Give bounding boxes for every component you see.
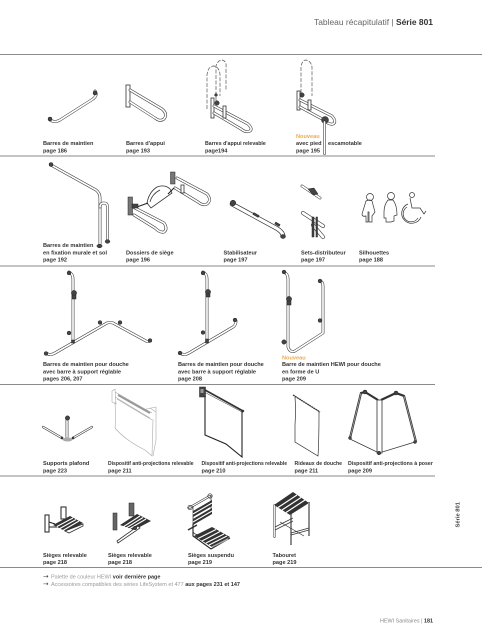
icon: stabiliser xyxy=(230,200,286,238)
icon: folding seat with leg xyxy=(113,503,151,543)
label: Barres de maintien en fixation murale et sol: page 192 xyxy=(43,258,67,264)
note: compatible accessories: → xyxy=(43,580,49,588)
icon: silhouettes woman, man, wheelchair xyxy=(362,192,426,223)
icon: folding splash guard, light xyxy=(112,389,156,456)
icon: folding seat 1 xyxy=(45,507,83,533)
label: first folding splash guard caption: Dispositif anti-projections relevable xyxy=(108,461,194,467)
label: avec pied escamotable: escamotable xyxy=(328,141,362,147)
icon: shower bar with adjustable support 1 xyxy=(44,271,152,355)
label: shower bar 1: pages 206, 207 xyxy=(43,377,82,383)
label: shower bar 2: Barres de maintien pour douche xyxy=(178,362,264,368)
label: Silhouettes: page 188 xyxy=(359,258,383,264)
label: free-standing guard caption: page 209 xyxy=(348,468,372,474)
icon: suspended seat xyxy=(188,494,230,549)
label: first folding splash guard caption: page 211 xyxy=(108,468,132,474)
label: Sièges relevable: page 218 xyxy=(43,560,67,566)
label: shower bar 2: page 208 xyxy=(178,377,202,383)
label: Barres de maintien en fixation murale et sol: en fixation murale et sol xyxy=(43,250,107,256)
icon: grab bar xyxy=(48,91,97,122)
icon: folding splash guard, dark xyxy=(200,387,244,457)
label: Barres d'appui: page 193 xyxy=(126,148,150,154)
label: Silhouettes: Silhouettes xyxy=(359,250,389,256)
label: Sets-distributeur: page 197 xyxy=(301,258,325,264)
icon: support bar with retractable foot xyxy=(297,60,335,154)
icon: U-shaped shower bar xyxy=(282,270,323,352)
label: Stabilisateur: Stabilisateur xyxy=(224,250,257,256)
label: Dossiers de siège: Dossiers de siège xyxy=(126,250,174,256)
icon: ceiling supports xyxy=(43,416,92,442)
label: Supports plafond: page 223 xyxy=(43,468,67,474)
note: colour palette: Palette de couleur HEWI xyxy=(51,574,113,580)
label: shower bar 1: Barres de maintien pour douche xyxy=(43,362,129,368)
label: Barres d'appui: Barres d'appui xyxy=(126,141,165,147)
note: colour palette: voir dernière page xyxy=(113,574,160,580)
label: Barres de maintien: Barres de maintien xyxy=(43,141,93,147)
page header title: Tableau récapitulatif | Série 801 xyxy=(314,17,433,27)
note: compatible accessories: aux pages 231 et 147 xyxy=(185,582,240,588)
icon: stool xyxy=(274,492,309,544)
footer page number: HEWI Sanitaires | 181 xyxy=(380,618,433,624)
label: second folding splash guard caption: page 210 xyxy=(202,468,225,474)
label: U-shaped bar caption: en forme de U xyxy=(282,369,319,375)
label: Barres d'appui relevable: Barres d'appui relevable xyxy=(205,141,266,147)
icon: seat backrest xyxy=(128,172,210,232)
label: Sièges relevable 2: Sièges relevable xyxy=(108,553,152,559)
label: Barres de maintien en fixation murale et sol: Barres de maintien xyxy=(43,243,93,249)
label: Nouveau: Nouveau xyxy=(282,356,306,362)
label: avec pied escamotable: page 195 xyxy=(296,148,320,154)
icon: folding support bar xyxy=(207,60,251,132)
label: Supports plafond: Supports plafond xyxy=(43,461,89,467)
icon: distributor sets xyxy=(302,186,323,237)
label: Barres de maintien: page 186 xyxy=(43,148,67,154)
label: shower bar 1: avec barre à support réglable xyxy=(43,369,121,375)
label: U-shaped bar caption: Barre de maintien HEWI pour douche xyxy=(282,362,381,368)
note: compatible accessories: Accessoires compatibles des séries LifeSystem et 477 xyxy=(51,582,185,588)
label: Sets-distributeur: Sets-distributeur xyxy=(301,250,346,256)
icon: free-standing splash guard xyxy=(348,390,416,455)
label: Sièges relevable: Sièges relevable xyxy=(43,553,87,559)
label: Sièges suspendu: page 219 xyxy=(188,560,212,566)
icon: shower bar with adjustable support 2 xyxy=(178,271,237,355)
label: Tabouret: Tabouret xyxy=(272,553,296,559)
label: avec pied escamotable: avec pied xyxy=(296,141,322,147)
label: Nouveau: Nouveau xyxy=(296,134,320,140)
icon: wall and floor bar xyxy=(49,162,110,248)
note: colour palette: → xyxy=(43,572,49,580)
label: Rideaux de douche: Rideaux de douche xyxy=(294,461,342,467)
label: Rideaux de douche: page 211 xyxy=(294,468,318,474)
label: U-shaped bar caption: page 209 xyxy=(282,377,306,383)
label: Dossiers de siège: page 196 xyxy=(126,258,150,264)
icon: support bar xyxy=(126,85,166,120)
vertical series label: Série 801 xyxy=(456,501,462,528)
label: Tabouret: page 219 xyxy=(272,560,296,566)
label: second folding splash guard caption: Dispositif anti-projections relevable xyxy=(202,461,287,467)
label: Stabilisateur: page 197 xyxy=(224,258,247,264)
icon: shower curtain xyxy=(293,395,320,456)
label: shower bar 2: avec barre à support réglable xyxy=(178,369,256,375)
label: Sièges relevable 2: page 218 xyxy=(108,560,132,566)
label: free-standing guard caption: Dispositif anti-projections à poser xyxy=(348,461,433,467)
label: Sièges suspendu: Sièges suspendu xyxy=(188,553,234,559)
label: Barres d'appui relevable: page194 xyxy=(205,148,228,154)
